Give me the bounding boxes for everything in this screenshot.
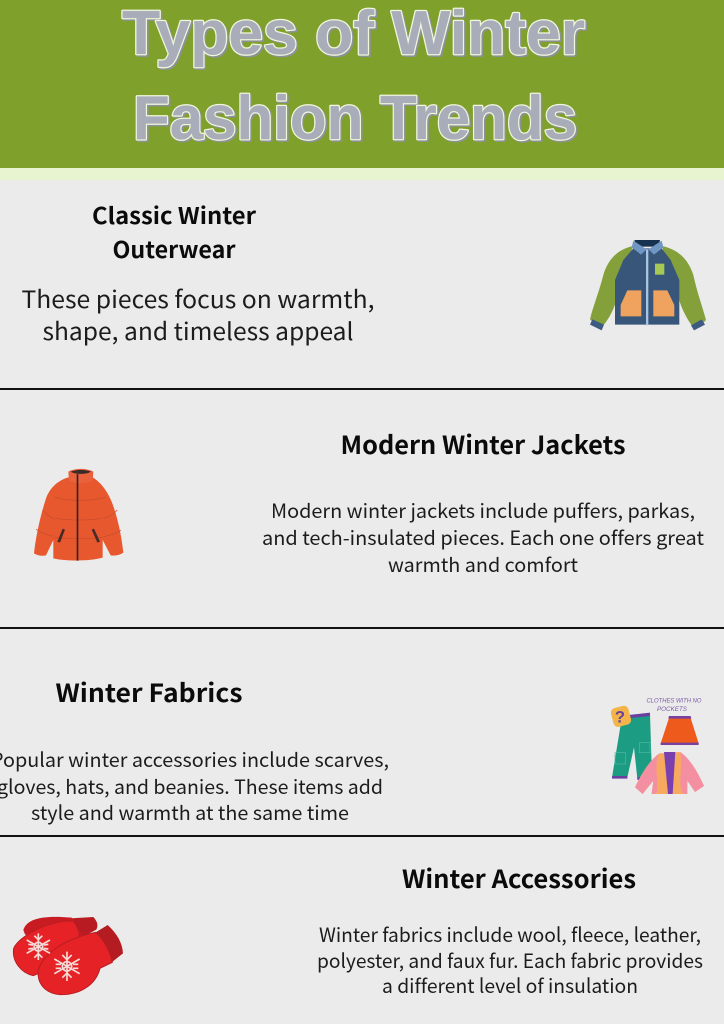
- heading: modern winter jackets: Modern Winter Jackets: [340, 426, 626, 462]
- title: Fashion Trends: [135, 86, 579, 155]
- panel: winter fabrics: [0, 674, 704, 826]
- text: winter fabrics description: Popular winter accessories include scarves,: [0, 744, 389, 773]
- panel: classic winter outerwear: [22, 197, 706, 347]
- text: classic winter description: shape, and timeless appeal: [42, 312, 354, 347]
- text: modern jackets description: and tech-insulated pieces. Each one offers great: [262, 522, 705, 551]
- heading: winter accessories: Winter Accessories: [402, 860, 636, 896]
- icon: clothes with no pockets: [610, 699, 704, 794]
- header banner: [0, 0, 724, 180]
- text: winter fabrics description: gloves, hats, and beanies. These items add: [0, 771, 383, 800]
- icon: clothes with no pockets: CLOTHES WITH NO: [646, 699, 702, 705]
- title: Fashion Trends: [133, 84, 577, 153]
- text: winter fabrics description: style and warmth at the same time: [31, 797, 349, 826]
- heading: classic winter outerwear: Outerwear: [112, 231, 236, 265]
- title: Types of Winter: [122, 0, 585, 68]
- icon: bomber jacket: [590, 240, 706, 330]
- panel: winter accessories: [13, 860, 703, 999]
- icon: clothes with no pockets: POCKETS: [657, 707, 687, 713]
- heading: classic winter outerwear: Classic Winter: [92, 197, 257, 231]
- icon: red mittens: [13, 917, 123, 995]
- text: classic winter description: These pieces focus on warmth,: [22, 280, 374, 315]
- text: winter accessories description: polyester, and faux fur. Each fabric provides: [317, 945, 703, 974]
- icon: orange puffer jacket: [34, 469, 123, 561]
- title: Types of Winter: [122, 0, 585, 68]
- text: modern jackets description: warmth and comfort: [388, 549, 579, 578]
- text: winter accessories description: Winter fabrics include wool, fleece, leather,: [319, 919, 701, 948]
- text: winter accessories description: a different level of insulation: [382, 970, 638, 999]
- panel: modern winter jackets: [34, 426, 705, 578]
- title: Fashion Trends: [133, 84, 577, 153]
- title: Types of Winter: [124, 1, 587, 70]
- title: [122, 0, 587, 155]
- heading: winter fabrics: Winter Fabrics: [56, 674, 242, 710]
- icon: clothes with no pockets: ?: [615, 708, 625, 727]
- text: modern jackets description: Modern winter jackets include puffers, parkas,: [271, 495, 695, 524]
